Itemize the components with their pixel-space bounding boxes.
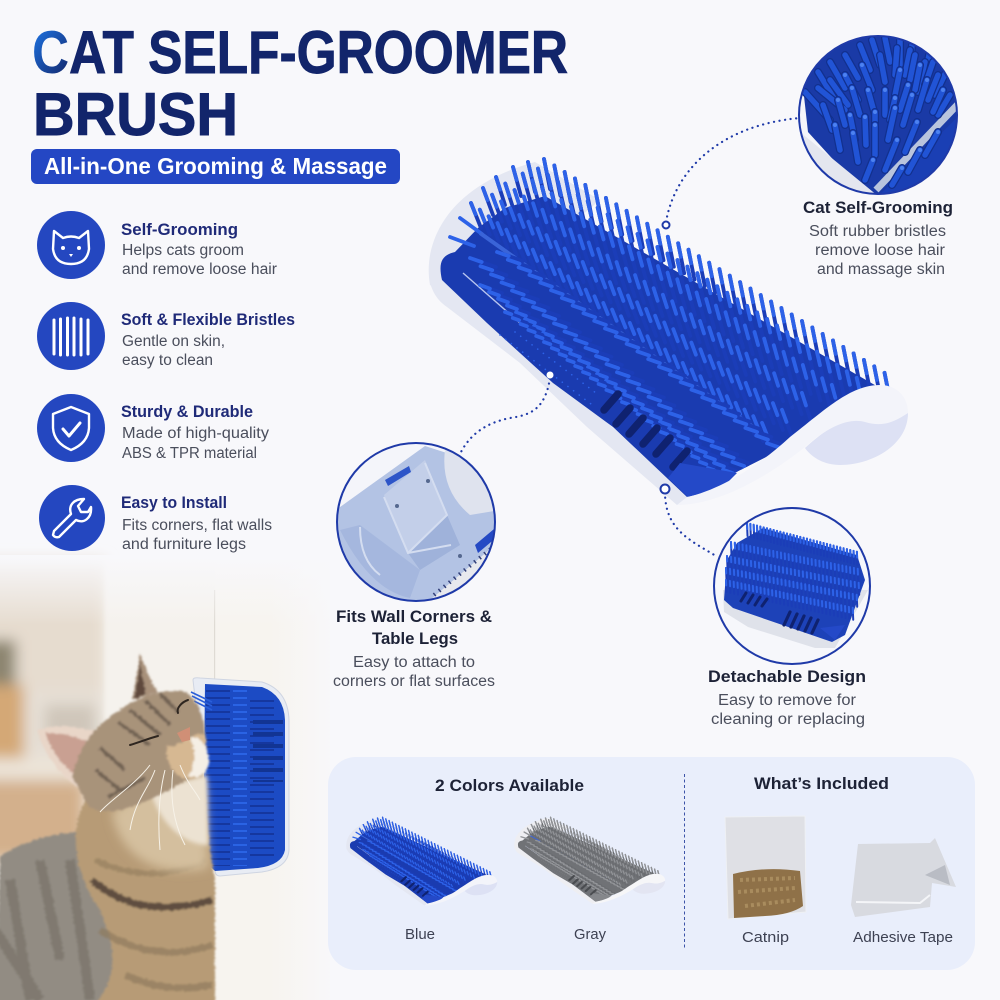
- title: BRUSH: [33, 81, 238, 148]
- label: catnip: Catnip: [742, 929, 789, 946]
- label: adhesive tape: Adhesive Tape: [853, 929, 953, 946]
- feature: soft bristles: [37, 302, 295, 370]
- inset circle: bristles: [798, 35, 958, 195]
- label: blue: Blue: [405, 926, 435, 943]
- main product brush: [429, 159, 908, 536]
- feature: self-grooming: Helps cats groom: [122, 242, 244, 259]
- inset circle: detached insert: [714, 508, 870, 664]
- title: [32, 19, 568, 148]
- feature: self-grooming: and remove loose hair: [122, 261, 277, 278]
- feature: soft bristles: Gentle on skin,: [122, 333, 225, 350]
- callout: detachable: Detachable Design: [708, 667, 866, 686]
- callout: cat self-grooming: Cat Self-Grooming: [803, 198, 953, 217]
- cat: [0, 653, 215, 1000]
- heading: included: What’s Included: [754, 774, 889, 793]
- feature: install: and furniture legs: [122, 536, 246, 553]
- subtitle pill: All-in-One Grooming & Massage: [44, 153, 387, 179]
- callout: cat self-grooming: Soft rubber bristles: [809, 223, 946, 240]
- callout: wall corners: Easy to attach to: [353, 654, 475, 671]
- feature: sturdy: [37, 394, 269, 462]
- callout: detachable: [708, 508, 870, 728]
- feature: soft bristles: easy to clean: [122, 352, 213, 369]
- title: CAT SELF-GROOMER: [32, 19, 568, 86]
- dotted connectors: [461, 118, 800, 556]
- feature list: [37, 211, 295, 553]
- inset circle: back of brush: [336, 443, 500, 605]
- product: gray: [514, 817, 665, 912]
- product: adhesive tape: [851, 838, 956, 917]
- callout: wall corners: Table Legs: [372, 629, 458, 648]
- callout: wall corners: [333, 443, 500, 690]
- feature: sturdy: Made of high-quality: [122, 425, 269, 442]
- feature: install: Fits corners, flat walls: [122, 517, 272, 534]
- label: gray: Gray: [574, 926, 606, 943]
- feature: soft bristles: Soft & Flexible Bristles: [121, 310, 295, 329]
- connector anchor dots: [546, 222, 670, 494]
- small wall-mounted brush: [191, 678, 289, 876]
- feature: install: Easy to Install: [121, 493, 227, 512]
- panel: colors and contents: [328, 757, 975, 970]
- feature: self-grooming: Self-Grooming: [121, 220, 238, 239]
- feature: install: [39, 485, 272, 553]
- callout: detachable: Easy to remove for: [718, 692, 856, 709]
- callout: detachable: cleaning or replacing: [711, 711, 865, 728]
- feature: self-grooming: [37, 211, 277, 279]
- callout: wall corners: corners or flat surfaces: [333, 673, 495, 690]
- callout: cat self-grooming: remove loose hair: [815, 242, 945, 259]
- feature: sturdy: Sturdy & Durable: [121, 402, 253, 421]
- heading: colors: 2 Colors Available: [435, 776, 584, 795]
- feature: sturdy: ABS & TPR material: [122, 445, 257, 462]
- callout: wall corners: Fits Wall Corners &: [336, 607, 492, 626]
- product: blue: [346, 817, 497, 913]
- callout: cat self-grooming: [798, 35, 958, 278]
- lifestyle photo: cat using wall brush: [0, 555, 340, 1000]
- product: catnip bag: [725, 816, 806, 919]
- callout: cat self-grooming: and massage skin: [817, 261, 945, 278]
